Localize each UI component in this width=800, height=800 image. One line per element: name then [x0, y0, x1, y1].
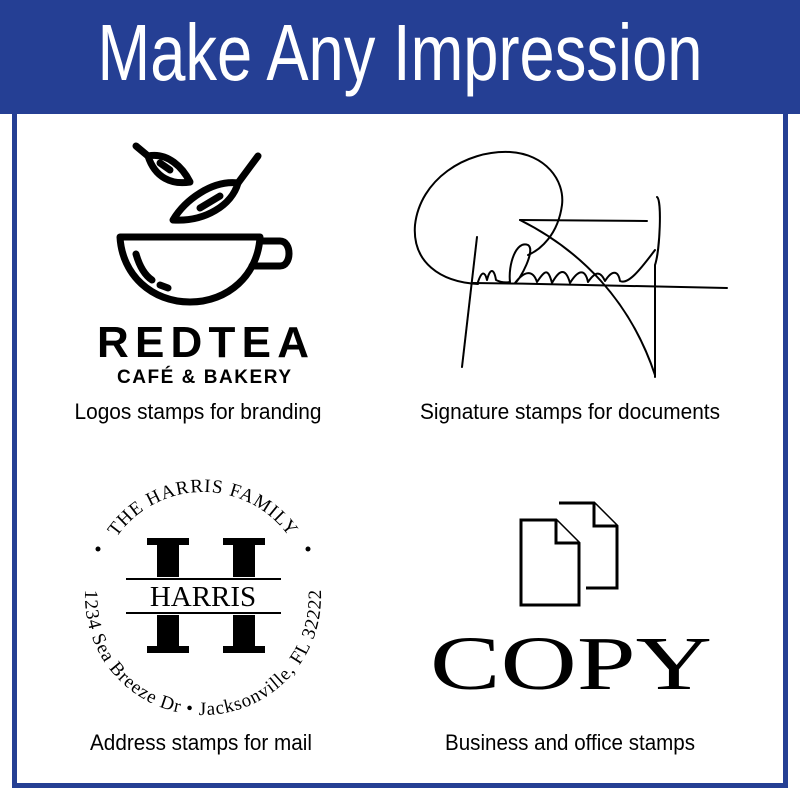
panel: logo stamp — [97, 146, 309, 388]
circular text top: THE HARRIS FAMILY — [106, 480, 298, 535]
caption: address: Address stamps for mail — [90, 730, 312, 755]
COPY text: COPY — [430, 622, 712, 706]
panel: copy stamp — [430, 503, 712, 706]
caption: logos: Logos stamps for branding — [74, 399, 322, 424]
brand name: REDTEA — [97, 318, 309, 367]
circular text bottom: 1234 Sea Breeze Dr • Jacksonville, FL 32222 — [84, 590, 322, 716]
icon: teacup with leaves — [120, 146, 289, 302]
panel: signature — [415, 152, 727, 377]
icon: documents — [521, 503, 617, 605]
monogram H — [126, 538, 281, 653]
caption: signature: Signature stamps for documents — [420, 399, 720, 424]
panel: address stamp — [84, 480, 322, 716]
subtitle: CAFÉ & BAKERY — [117, 366, 291, 388]
monogram H: HARRIS — [150, 581, 256, 613]
header band — [0, 0, 800, 114]
caption: business: Business and office stamps — [445, 730, 695, 755]
